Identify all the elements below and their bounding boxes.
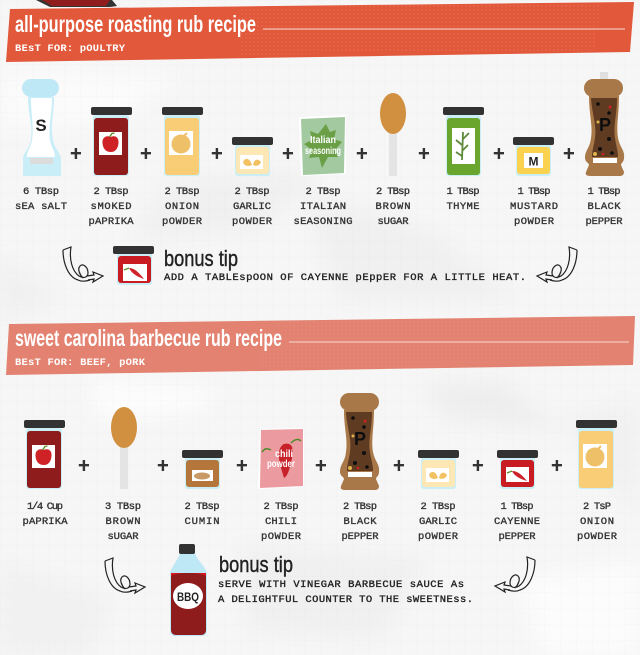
label: thyme (446, 186, 480, 213)
text: vinegar sauce tip: A DELIGHTFUL COUNTER TO THE sWEETNEss. (218, 594, 473, 606)
label: cayenne pepper (494, 501, 540, 543)
label: black pepper: 2 TBsp (343, 501, 377, 513)
label: paprika: pAPRIKA (22, 516, 68, 528)
text: cayenne tip: ADD A TABLEspOON OF CAYENNE pEppER FOR A LITTLE HEAT. (164, 272, 526, 284)
label: smoked paprika: sMOKED (90, 201, 132, 213)
label: chili powder: pOWDER (261, 531, 302, 543)
label: black pepper: pEPPER (586, 216, 623, 228)
ingredient: garlic powder jar (418, 450, 459, 489)
ingredient: black pepper mill (584, 72, 624, 176)
label: italian seasoning: ITALIAN (300, 201, 346, 213)
label: brown sugar (105, 501, 141, 543)
label: garlic powder (232, 186, 273, 228)
arrow: second tip left swirl (105, 558, 145, 593)
label: sea salt: sEA sALT (15, 201, 67, 213)
label: chili powder (261, 501, 302, 543)
label: smoked paprika (88, 186, 134, 228)
label: italian seasoning: sEASONING (294, 216, 352, 228)
label: brown sugar: sUGAR (108, 531, 139, 543)
ingredient: thyme jar (443, 107, 484, 176)
label: black pepper (586, 186, 623, 228)
label: black pepper: BLACK (344, 516, 377, 528)
label: onion powder: ONION (580, 516, 614, 528)
label: onion powder (162, 186, 203, 228)
label: black pepper: BLACK (588, 201, 621, 213)
label: sea salt (15, 186, 67, 213)
label: cumin (184, 501, 220, 528)
ingredient: brown sugar spoon (380, 93, 406, 176)
ingredient: italian seasoning packet: seasoning (305, 146, 341, 157)
label: brown sugar: BROWN (106, 516, 140, 528)
label: brown sugar (376, 186, 410, 228)
label: smoked paprika: 2 TBsp (94, 186, 128, 198)
ingredient: italian seasoning packet (299, 115, 346, 176)
label: onion powder (577, 501, 618, 543)
label: thyme: 1 TBsp (446, 186, 480, 198)
label: cumin: 2 TBsp (184, 501, 220, 513)
heading: bonus tip one: bonus tip (164, 246, 238, 271)
banner rule (263, 28, 625, 30)
label: onion powder: ONION (165, 201, 199, 213)
ingredient: black pepper mill: P (599, 115, 611, 135)
label: brown sugar: sUGAR (378, 216, 409, 228)
subheading: best for poultry: BEsT FOR: pOULTRY (15, 43, 126, 55)
arrow: bonus tip left swirl (63, 247, 103, 282)
icon: bbq sauce bottle (170, 544, 207, 636)
label: black pepper: pEPPER (342, 531, 379, 543)
label: chili powder: 2 TBsp (264, 501, 298, 513)
label: brown sugar: 3 TBsp (105, 501, 141, 513)
ingredient: sea salt shaker (22, 79, 61, 176)
label: italian seasoning (294, 186, 352, 228)
ingredient: garlic powder jar (232, 137, 273, 176)
ingredient: onion powder jar (162, 107, 203, 176)
previous section bottle fragment (36, 0, 117, 7)
ingredient: paprika jar (24, 420, 65, 489)
arrow: bonus tip right swirl (537, 247, 577, 282)
icon: bbq sauce bottle: BBQ (177, 590, 199, 604)
ingredient: chili powder packet: chili (275, 449, 293, 460)
banner: sweet carolina barbecue rub recipe (6, 316, 635, 375)
label: garlic powder: GARLIC (233, 201, 271, 213)
ingredient: mustard powder jar (513, 137, 554, 176)
label: garlic powder: 2 TBsp (234, 186, 270, 198)
text: vinegar sauce tip (218, 579, 473, 606)
label: cayenne pepper: pEPPER (498, 531, 536, 543)
label: mustard powder (510, 186, 558, 228)
ingredient: smoked paprika jar (91, 107, 132, 176)
label: garlic powder: pOWDER (232, 216, 273, 228)
label: onion powder: 2 TBsp (164, 186, 200, 198)
text: vinegar sauce tip: sERVE WITH VINEGAR BARBECUE sAUCE As (218, 579, 464, 591)
ingredient: onion powder jar (576, 420, 617, 489)
label: onion powder: 2 TsP (583, 501, 611, 513)
ingredient: brown sugar spoon (111, 407, 137, 489)
plus signs row two (79, 460, 562, 471)
label: garlic powder: GARLIC (419, 516, 457, 528)
label: cumin: CUMIN (184, 516, 220, 528)
plus signs row one (71, 148, 574, 159)
ingredient: cumin jar (182, 450, 223, 489)
label: onion powder: pOWDER (577, 531, 618, 543)
label: mustard powder: pOWDER (514, 216, 555, 228)
heading: bonus tip two: bonus tip (219, 552, 293, 577)
banner rule (289, 341, 629, 343)
label: cayenne pepper: CAYENNE (494, 516, 540, 528)
ingredient: chili powder packet: powder (267, 459, 295, 470)
label: black pepper (342, 501, 379, 543)
subheading: best for beef, pork: BEsT FOR: BEEF, pORK (15, 357, 146, 369)
label: mustard powder: 1 TBsp (518, 186, 550, 198)
banner: all-purpose roasting rub recipe (6, 2, 634, 62)
label: garlic powder (418, 501, 459, 543)
label: brown sugar: 2 TBsp (376, 186, 410, 198)
label: thyme: THYME (446, 201, 480, 213)
ingredient: black pepper mill (340, 393, 379, 490)
label: black pepper: 1 TBsp (588, 186, 620, 198)
ingredient: chili powder packet (258, 428, 304, 489)
label: cayenne pepper: 1 TBsp (500, 501, 534, 513)
ingredient: cayenne pepper jar (497, 450, 538, 489)
icon: cayenne jar bonus (113, 246, 154, 285)
label: onion powder: pOWDER (162, 216, 203, 228)
label: paprika: 1/4 Cup (27, 501, 63, 513)
label: paprika (22, 501, 68, 528)
ingredient: black pepper mill: P (354, 429, 366, 449)
ingredient: sea salt shaker: S (35, 116, 47, 135)
arrow: second tip right swirl (495, 557, 535, 592)
label: sea salt: 6 TBsp (23, 186, 59, 198)
label: chili powder: CHILI (265, 516, 297, 528)
label: garlic powder: pOWDER (418, 531, 459, 543)
label: mustard powder: MUSTARD (510, 201, 558, 213)
ingredient: mustard powder jar: M (528, 154, 538, 168)
label: italian seasoning: 2 TBsp (306, 186, 340, 198)
ingredient: italian seasoning packet: Italian (310, 135, 336, 146)
heading: recipe one title: all-purpose roasting rub recipe (15, 11, 256, 37)
label: brown sugar: BROWN (376, 201, 410, 213)
label: garlic powder: 2 TBsp (420, 501, 456, 513)
label: smoked paprika: pAPRIKA (88, 216, 134, 228)
heading: recipe two title: sweet carolina barbecue rub recipe (15, 325, 282, 351)
